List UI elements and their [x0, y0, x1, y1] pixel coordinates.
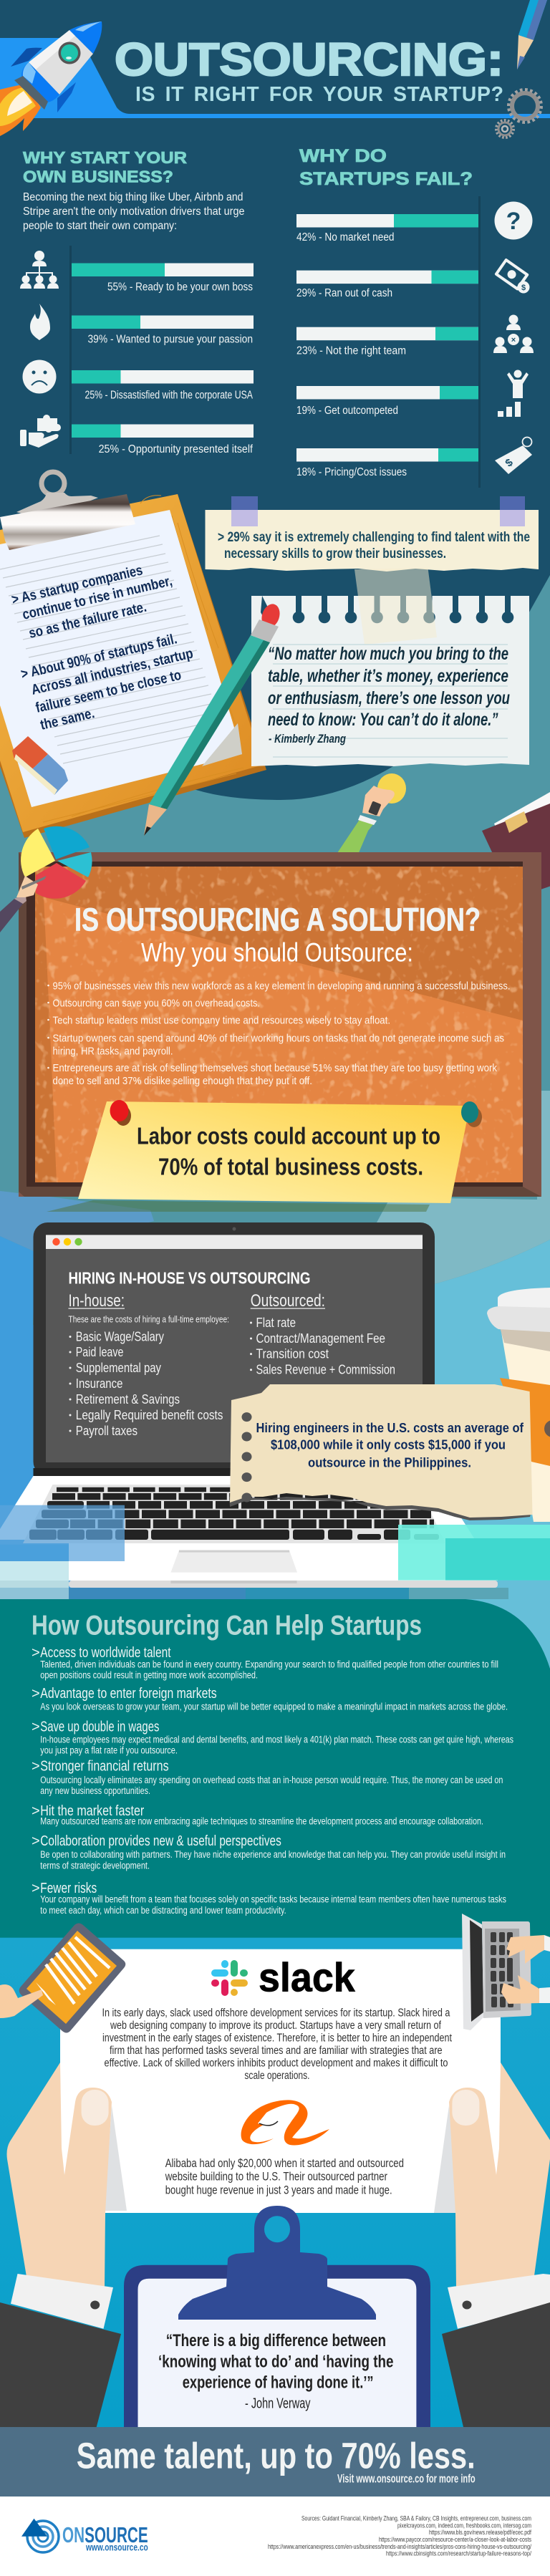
icon: price tag: $	[503, 456, 516, 470]
tape	[354, 568, 437, 645]
bullet list: Tech startup leaders must use company time and resources wisely to stay afloat.	[53, 1015, 390, 1027]
subtitle: IS IT RIGHT FOR YOUR STARTUP?	[135, 83, 503, 106]
logo: alibaba	[241, 2100, 329, 2146]
attribution: - John Verway	[245, 2396, 311, 2412]
quote: experience of having done it.’”	[183, 2373, 374, 2393]
icon: tablet	[0, 1924, 125, 2032]
bar chart: motivations: 25% - Dissastisfied with the corporate USA	[85, 390, 254, 402]
icon: person on growth bars	[498, 370, 529, 417]
pin: teal	[461, 1101, 482, 1127]
item: wages: >	[32, 1719, 40, 1735]
bullet list: Entrepreneurs are at risk of selling themselves short because 51% say that they are too busy getting work	[53, 1062, 497, 1074]
slack text: effective. Lack of skilled workers inhibits product development and makes it difficult to	[105, 2058, 448, 2070]
heading: WHY START YOUR	[23, 148, 187, 167]
logo: slack: slack	[259, 1955, 355, 2001]
icon: team with x	[493, 315, 534, 353]
bar chart: motivations: 39% - Wanted to pursue your passion	[87, 334, 253, 345]
clipboard text: so as the failure rate.	[27, 599, 148, 642]
column: in-house: Legally Required benefit costs	[76, 1408, 223, 1422]
intro text: Stripe aren't the only motivation drivers that urge	[23, 206, 245, 218]
intro text	[23, 191, 245, 232]
heading: STARTUPS FAIL?	[299, 169, 473, 189]
binding holes	[261, 596, 513, 624]
heading	[299, 146, 473, 189]
tape	[231, 496, 258, 510]
bullet list: Startup owners can spend around 40% of their working hours on tasks that do not generate income such as	[53, 1033, 504, 1044]
trackpad	[170, 1550, 297, 1573]
column: in-house: Basic Wage/Salary	[76, 1329, 164, 1344]
heading: WHY DO	[299, 146, 387, 166]
column: outsourced: Sales Revenue + Commission	[256, 1363, 395, 1377]
clipboard text: Across all industries, startup	[30, 645, 195, 698]
item: foreign markets: Advantage to enter foreign markets	[40, 1686, 217, 1702]
bar chart: failure reasons: 42% - No market need	[296, 231, 394, 243]
item: collaboration: >	[32, 1833, 40, 1849]
torn paper	[205, 510, 539, 571]
item: collaboration	[32, 1833, 506, 1871]
column: in-house: Retirement & Savings	[76, 1392, 180, 1407]
icon: question mark: ?	[506, 208, 521, 235]
sticky note: talent stat	[205, 496, 539, 571]
sticky note: labor costs: 70% of total business costs.	[158, 1153, 423, 1180]
item: fewer risks: Fewer risks	[40, 1881, 97, 1896]
clipboard text: continue to rise in number,	[21, 573, 174, 623]
clipboard	[0, 472, 266, 838]
icon: sad face	[23, 360, 56, 394]
icon: gears	[496, 90, 541, 138]
laptop	[0, 1222, 498, 1588]
panel: case studies	[0, 1914, 550, 2427]
column: outsourced: Flat rate	[256, 1316, 296, 1330]
notepad paper	[251, 596, 529, 766]
clipboard text: the same.	[39, 705, 96, 733]
icon: green pencil	[144, 602, 283, 836]
item: worldwide talent: >	[32, 1645, 40, 1661]
torn paper edge	[229, 1497, 532, 1520]
item: financial returns: Stronger financial returns	[40, 1759, 169, 1775]
column: in-house: Insurance	[76, 1376, 122, 1391]
white sheet	[60, 1949, 501, 2213]
column: in-house: These are the costs of hiring a full-time employee:	[69, 1315, 229, 1325]
alibaba text: bought huge revenue in just 3 years and made it huge.	[165, 2184, 392, 2196]
icon: puzzle in hand	[20, 415, 61, 448]
title: OUTSOURCING:	[115, 34, 503, 85]
icon: pie chart with hand	[0, 826, 92, 932]
icon: rocket	[0, 21, 102, 136]
metal clip	[0, 472, 135, 550]
quote: “There is a big difference between	[166, 2331, 386, 2350]
slack text	[102, 2007, 453, 2082]
sticky note: labor costs: Labor costs could account up to	[137, 1122, 440, 1149]
icon: flaming heart	[30, 304, 50, 340]
panel: how outsourcing can help	[0, 1599, 550, 1948]
heading: How Outsourcing Can Help Startups	[32, 1611, 422, 1641]
slack text: investment in the early stages of existence. Therefore, it is better to hire an independent	[102, 2032, 453, 2045]
item: collaboration: terms of strategic development.	[40, 1860, 150, 1871]
quote: ‘knowing what to do’ and ‘having the	[158, 2352, 394, 2371]
bottom banner	[0, 2427, 550, 2497]
note text: Hiring engineers in the U.S. costs an average of	[256, 1421, 524, 1435]
icon: question mark	[494, 202, 533, 239]
item: market faster: >	[32, 1803, 40, 1819]
bar chart: failure reasons: 18% - Pricing/Cost issues	[296, 466, 407, 478]
note text	[218, 529, 530, 561]
icon: team with x: ×	[511, 336, 516, 344]
clipboard text: failure seem to be close to	[34, 667, 183, 716]
quote text: - Kimberly Zhang	[269, 732, 346, 746]
bar chart: motivations: 25% - Opportunity presented itself	[99, 443, 254, 455]
bar chart: motivations	[72, 264, 254, 455]
clipboard text: > About 90% of startups fail.	[19, 631, 178, 682]
blue clipboard	[124, 2206, 430, 2427]
column: outsourced	[250, 1291, 395, 1377]
item: wages: you just pay a flat rate if you outsource.	[40, 1745, 178, 1756]
logo: slack	[211, 1955, 355, 2001]
icon: org chart	[20, 251, 59, 289]
note text: outsource in the Philippines.	[308, 1455, 471, 1470]
bullet list: hiring, HR tasks, and payroll.	[53, 1045, 173, 1057]
icon: folder	[482, 792, 550, 899]
bullet list: Outsourcing can save you 60% on overhead costs.	[53, 997, 260, 1010]
icon: laptop with typing hands	[462, 1914, 550, 2030]
icon: pencil	[517, 0, 547, 69]
right hand and sleeve	[442, 2063, 550, 2427]
column: outsourced: Outsourced:	[251, 1291, 325, 1311]
item: collaboration: Collaboration provides new & useful perspectives	[40, 1833, 281, 1849]
teal panel	[0, 1599, 550, 1948]
keyboard	[52, 1490, 434, 1524]
clipboard paper	[0, 510, 242, 807]
laptop screen	[33, 1222, 435, 1476]
bar chart: failure reasons: 29% - Ran out of cash	[296, 287, 392, 299]
translucent colour blocks	[0, 1505, 550, 1599]
sources	[268, 2514, 531, 2558]
notepad quote	[251, 568, 529, 766]
pin: red	[110, 1100, 131, 1126]
item: foreign markets	[32, 1686, 508, 1712]
column: in-house: Supplemental pay	[76, 1361, 161, 1375]
note paper	[230, 1384, 533, 1518]
coffee cup	[487, 1288, 550, 1522]
item: fewer risks: >	[32, 1881, 40, 1896]
icon: hand holding lightbulb	[333, 773, 406, 859]
intro text: people to start their own company:	[23, 220, 177, 232]
panel: is outsourcing a solution	[19, 852, 541, 1212]
slack text: In its early days, slack used offshore development services for its startup. Slack hired a	[102, 2007, 450, 2020]
screen heading: HIRING IN-HOUSE VS OUTSOURCING	[69, 1269, 311, 1288]
bullet list	[47, 980, 510, 1087]
clipboard text	[10, 562, 195, 733]
slack text: web designing company to improve its product. Startups have a very small return of	[110, 2020, 442, 2032]
intro text: Becoming the next big thing like Uber, Airbnb and	[23, 191, 243, 203]
item: financial returns: >	[32, 1759, 40, 1775]
footer	[0, 2497, 550, 2576]
bullet list: done to sell and 37% dislike selling enough that they put it off.	[53, 1075, 312, 1087]
note text: necessary skills to grow their businesses.	[224, 546, 446, 561]
logo: onsource: www.onsource.co	[85, 2542, 148, 2553]
bar chart: motivations: 55% - Ready to be your own boss	[107, 281, 253, 293]
item: market faster: Hit the market faster	[40, 1803, 145, 1819]
column: outsourced: Contract/Management Fee	[256, 1331, 385, 1346]
item: worldwide talent: Access to worldwide talent	[40, 1645, 171, 1661]
item: wages	[32, 1719, 513, 1756]
item: worldwide talent: open positions could result in getting more work accomplished.	[40, 1669, 258, 1680]
column: in-house: Paid leave	[76, 1345, 123, 1359]
banner blue shape	[0, 38, 550, 118]
section subtitle: Why you should Outsource:	[141, 938, 413, 967]
laptop base	[0, 1476, 498, 1581]
title banner	[0, 0, 550, 138]
bar chart: failure reasons: 19% - Get outcompeted	[296, 405, 398, 417]
column: in-house: Payroll taxes	[76, 1424, 138, 1438]
panel: why start your own business	[20, 148, 254, 455]
column: outsourced: Transition cost	[256, 1347, 329, 1361]
left hand and sleeve	[0, 2063, 121, 2427]
heading: OWN BUSINESS?	[23, 168, 173, 186]
column: in-house	[69, 1291, 229, 1438]
torn note: engineer cost	[229, 1384, 533, 1520]
banner link: Visit www.onsource.co for more info	[337, 2472, 476, 2486]
alibaba text	[165, 2157, 404, 2196]
heading	[23, 148, 187, 186]
item: financial returns	[32, 1759, 503, 1796]
corkboard frame	[19, 852, 541, 1197]
icon: cash: $	[521, 284, 526, 292]
alibaba text: Alibaba had only $20,000 when it started and outsourced	[165, 2157, 404, 2170]
item: worldwide talent	[32, 1645, 498, 1680]
note text: $108,000 while it only costs $15,000 if you	[271, 1437, 506, 1452]
column: in-house: In-house:	[69, 1291, 125, 1311]
logo: onsource: ONSOURCE	[62, 2522, 148, 2547]
sticky note: labor costs	[47, 1100, 482, 1212]
slack text: firm that has performed tasks several times and are familiar with strategies that are	[110, 2045, 443, 2057]
quote text	[268, 644, 510, 746]
punch holes	[242, 1412, 252, 1502]
panel: why do startups fail	[296, 146, 534, 488]
quote	[158, 2331, 394, 2393]
corkboard surface	[35, 867, 523, 1182]
alibaba text: website building to the U.S. Their outsourced partner	[165, 2171, 387, 2184]
icon: price tag	[495, 437, 532, 474]
slack text: scale operations.	[244, 2070, 309, 2082]
item: fewer risks	[32, 1881, 506, 1916]
item: wages: Save up double in wages	[40, 1719, 159, 1735]
icon: cash	[494, 258, 530, 294]
logo: onsource	[21, 2519, 148, 2553]
bar chart: failure reasons: 23% - Not the right team	[296, 345, 406, 357]
blue background	[0, 1938, 550, 2427]
clipboard board	[0, 494, 266, 838]
eraser	[12, 736, 68, 795]
item: market faster	[32, 1803, 483, 1827]
sheet fold shadows	[105, 2105, 459, 2213]
item: foreign markets: >	[32, 1686, 40, 1702]
bar chart: failure reasons	[296, 214, 478, 478]
clipboard clip	[178, 2206, 376, 2320]
item: financial returns: any new business opportunities.	[40, 1785, 150, 1796]
item: fewer risks: to meet each day, which can be distracting and lower team productivity.	[40, 1905, 286, 1916]
clipboard text: > As startup companies	[10, 562, 144, 608]
note text	[256, 1421, 524, 1470]
